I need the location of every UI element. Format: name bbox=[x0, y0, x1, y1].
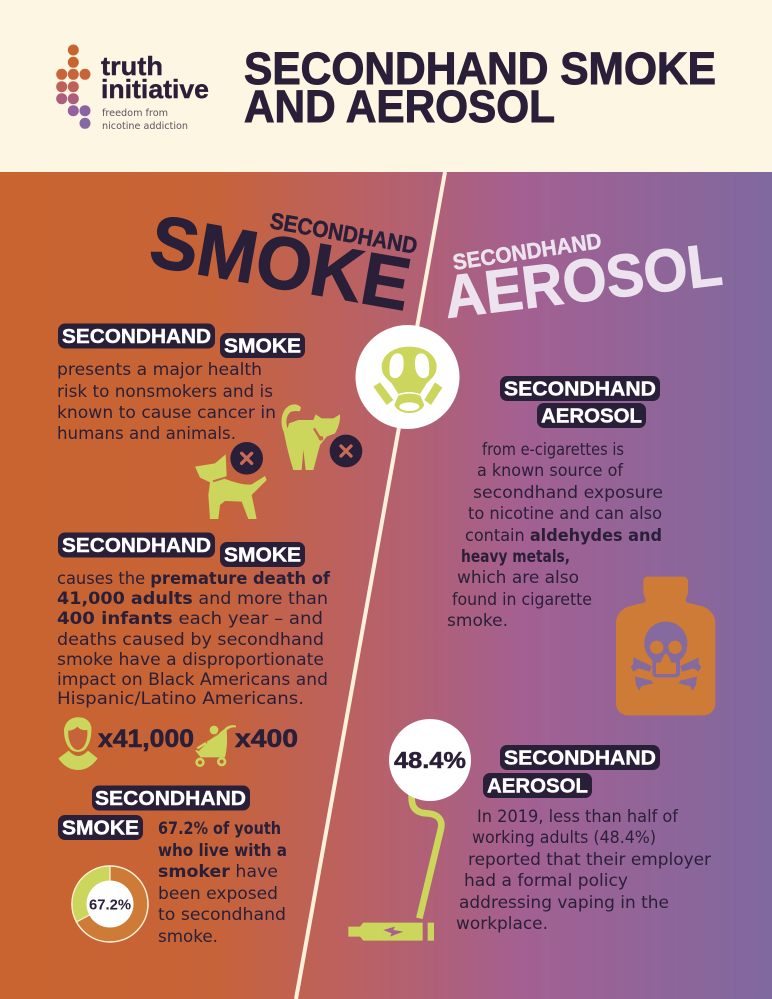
label: secondhand aerosol 2 bbox=[483, 745, 660, 798]
text block: major health risk bbox=[57, 360, 276, 443]
text block: major health risk: risk to nonsmokers and is bbox=[57, 382, 273, 401]
text block: premature death: deaths caused by secondhand bbox=[57, 630, 324, 649]
text block: workplace policy: had a formal policy bbox=[464, 871, 628, 890]
text block: youth exposure: to secondhand bbox=[158, 905, 286, 924]
label: secondhand smoke 3 bbox=[58, 786, 250, 840]
label: secondhand smoke 3: SMOKE bbox=[62, 818, 139, 840]
heading: secondhand smoke: SECONDHAND bbox=[268, 207, 419, 259]
logo: truth initiative bbox=[56, 44, 209, 132]
label: secondhand smoke 3: SECONDHAND bbox=[95, 788, 246, 810]
label: secondhand smoke 1 bbox=[58, 324, 305, 358]
text block: major health risk: presents a major health bbox=[57, 360, 262, 379]
text block: youth exposure bbox=[158, 819, 287, 946]
heading: secondhand aerosol: AEROSOL bbox=[440, 230, 726, 331]
text block: premature death: impact on Black Americans and bbox=[57, 670, 328, 689]
icon: vape with 48.4% bubble: 48.4% bbox=[394, 747, 466, 773]
text block: e-cigarette exposure: smoke. bbox=[447, 611, 508, 630]
text block: premature death: smoke have a disproportionate bbox=[57, 650, 324, 669]
header band bbox=[0, 0, 772, 172]
label: secondhand smoke 1: SMOKE bbox=[224, 336, 301, 358]
heading: secondhand smoke: SMOKE bbox=[144, 199, 417, 326]
text block: e-cigarette exposure: to nicotine and can also bbox=[468, 504, 662, 523]
text block: major health risk: known to cause cancer in bbox=[57, 403, 276, 422]
label: secondhand aerosol 1 bbox=[500, 376, 660, 428]
label: secondhand smoke 2: SMOKE bbox=[224, 544, 301, 566]
stat: x41,000: x41,000 bbox=[98, 725, 194, 753]
text block: e-cigarette exposure: heavy metals, bbox=[461, 547, 570, 566]
icon: cat bbox=[282, 404, 362, 470]
logo: truth initiative: truth bbox=[101, 51, 163, 81]
logo: truth initiative: nicotine addiction bbox=[102, 121, 188, 132]
label: secondhand aerosol 1: SECONDHAND bbox=[504, 378, 656, 400]
chart: donut 67.2% bbox=[72, 866, 148, 942]
logo: truth initiative: freedom from bbox=[102, 108, 168, 119]
chart: donut 67.2%: 67.2% bbox=[89, 896, 131, 914]
label: secondhand smoke 2 bbox=[58, 532, 305, 567]
text block: major health risk: humans and animals. bbox=[57, 424, 236, 443]
text block: youth exposure: smoke. bbox=[158, 927, 218, 946]
text block: premature death bbox=[57, 569, 331, 708]
text block: workplace policy: working adults (48.4%) bbox=[472, 828, 656, 847]
logo: truth initiative: initiative bbox=[101, 74, 209, 104]
text block: e-cigarette exposure: a known source of bbox=[477, 461, 624, 480]
stat: x400: x400 bbox=[235, 725, 298, 753]
divider line bbox=[296, 172, 445, 999]
label: secondhand aerosol 2: SECONDHAND bbox=[504, 748, 656, 770]
text block: workplace policy bbox=[456, 807, 711, 933]
text block: e-cigarette exposure: from e-cigarettes is bbox=[482, 440, 624, 459]
text block: youth exposure: smoker have bbox=[158, 862, 278, 881]
text block: e-cigarette exposure: contain aldehydes and bbox=[465, 526, 662, 545]
label: secondhand smoke 2: SECONDHAND bbox=[62, 535, 211, 557]
text block: youth exposure: who live with a bbox=[158, 841, 287, 860]
text block: e-cigarette exposure bbox=[447, 440, 663, 630]
text block: e-cigarette exposure: which are also bbox=[457, 568, 579, 587]
icon: vape with 48.4% bubble bbox=[348, 719, 471, 941]
text block: premature death: causes the premature death of bbox=[57, 569, 331, 588]
text block: youth exposure: been exposed bbox=[158, 884, 278, 903]
text block: premature death: 400 infants each year – and bbox=[57, 609, 323, 628]
text block: workplace policy: addressing vaping in the bbox=[459, 893, 669, 912]
icon: gas mask bbox=[356, 325, 460, 429]
icon: stroller bbox=[195, 725, 236, 766]
title: AND AEROSOL bbox=[244, 81, 555, 132]
text block: premature death: 41,000 adults and more than bbox=[57, 589, 328, 608]
title bbox=[244, 43, 716, 132]
text block: workplace policy: workplace. bbox=[456, 914, 548, 933]
label: secondhand aerosol 1: AEROSOL bbox=[541, 406, 642, 428]
text block: workplace policy: reported that their employer bbox=[468, 850, 711, 869]
heading: secondhand aerosol: SECONDHAND bbox=[451, 228, 603, 275]
text block: premature death: Hispanic/Latino Americans. bbox=[57, 689, 304, 708]
icon: poison bottle bbox=[616, 577, 715, 715]
text block: e-cigarette exposure: secondhand exposure bbox=[473, 483, 663, 502]
icon: dog bbox=[195, 442, 267, 519]
text block: workplace policy: In 2019, less than half of bbox=[477, 807, 679, 826]
icon: adult bbox=[58, 717, 98, 770]
label: secondhand smoke 1: SECONDHAND bbox=[62, 326, 211, 348]
label: secondhand aerosol 2: AEROSOL bbox=[487, 776, 588, 798]
text block: youth exposure: 67.2% of youth bbox=[158, 819, 281, 838]
text block: e-cigarette exposure: found in cigarette bbox=[452, 590, 592, 609]
title: SECONDHAND SMOKE bbox=[244, 43, 716, 94]
